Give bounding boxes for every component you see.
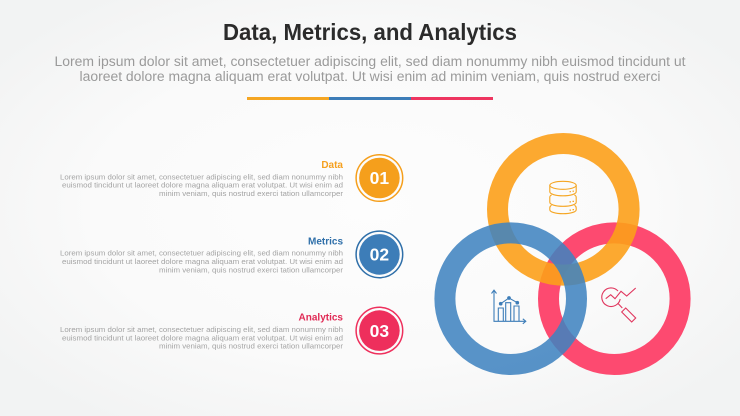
description: Analytics	[60, 325, 344, 351]
description: Data: Lorem ipsum dolor sit amet, consectetuer adipiscing elit, sed diam nonummy nibh	[60, 172, 343, 181]
subtitle text: laoreet dolore magna aliquam erat volutpat. Ut wisi enim ad minim veniam, quis nostrud exerci	[80, 69, 661, 84]
description: Analytics: euismod tincidunt ut laoreet dolore magna aliquam erat volutpat. Ut wisi enim ad	[62, 333, 343, 342]
icon: bar chart	[492, 290, 526, 324]
icon: magnifier with trend line	[602, 288, 636, 322]
item 03: Analytics	[60, 307, 403, 354]
subtitle text	[54, 54, 686, 84]
subtitle text: Lorem ipsum dolor sit amet, consectetuer adipiscing elit, sed diam nonummy nibh euismod tincidunt ut	[54, 54, 686, 69]
badge 03	[356, 307, 403, 354]
venn rings	[445, 144, 680, 364]
badge 01	[356, 155, 403, 201]
description: Metrics: euismod tincidunt ut laoreet dolore magna aliquam erat volutpat. Ut wisi enim ad	[62, 257, 343, 266]
ring: orange	[498, 144, 629, 275]
description: Analytics: minim veniam, quis nostrud exerci tation ullamcorper	[159, 342, 344, 351]
ring: red	[548, 233, 680, 364]
description: Data: minim veniam, quis nostrud exerci tation ullamcorper	[159, 189, 344, 198]
ring: blue	[445, 233, 576, 364]
label: Metrics: Metrics	[308, 236, 343, 247]
icon: database	[550, 181, 576, 214]
description: Data	[60, 172, 344, 198]
badge 02	[356, 231, 403, 278]
item 01: Data	[60, 155, 403, 201]
item 02: Metrics	[60, 231, 403, 278]
description: Metrics	[60, 249, 344, 274]
badge 02: 02	[370, 245, 389, 265]
label: Data: Data	[321, 160, 343, 171]
description: Metrics: Lorem ipsum dolor sit amet, consectetuer adipiscing elit, sed diam nonummy nibh	[60, 249, 343, 258]
description: Analytics: Lorem ipsum dolor sit amet, consectetuer adipiscing elit, sed diam nonummy nibh	[60, 325, 343, 334]
badge 03: 03	[370, 321, 389, 341]
tricolor underline	[247, 97, 493, 100]
label: Analytics: Analytics	[299, 313, 343, 324]
title: Data, Metrics, and Analytics	[223, 19, 517, 45]
badge 01: 01	[370, 168, 389, 188]
description: Data: euismod tincidunt ut laoreet dolore magna aliquam erat volutpat. Ut wisi enim ad	[62, 181, 343, 190]
description: Metrics: minim veniam, quis nostrud exerci tation ullamcorper	[159, 265, 344, 274]
